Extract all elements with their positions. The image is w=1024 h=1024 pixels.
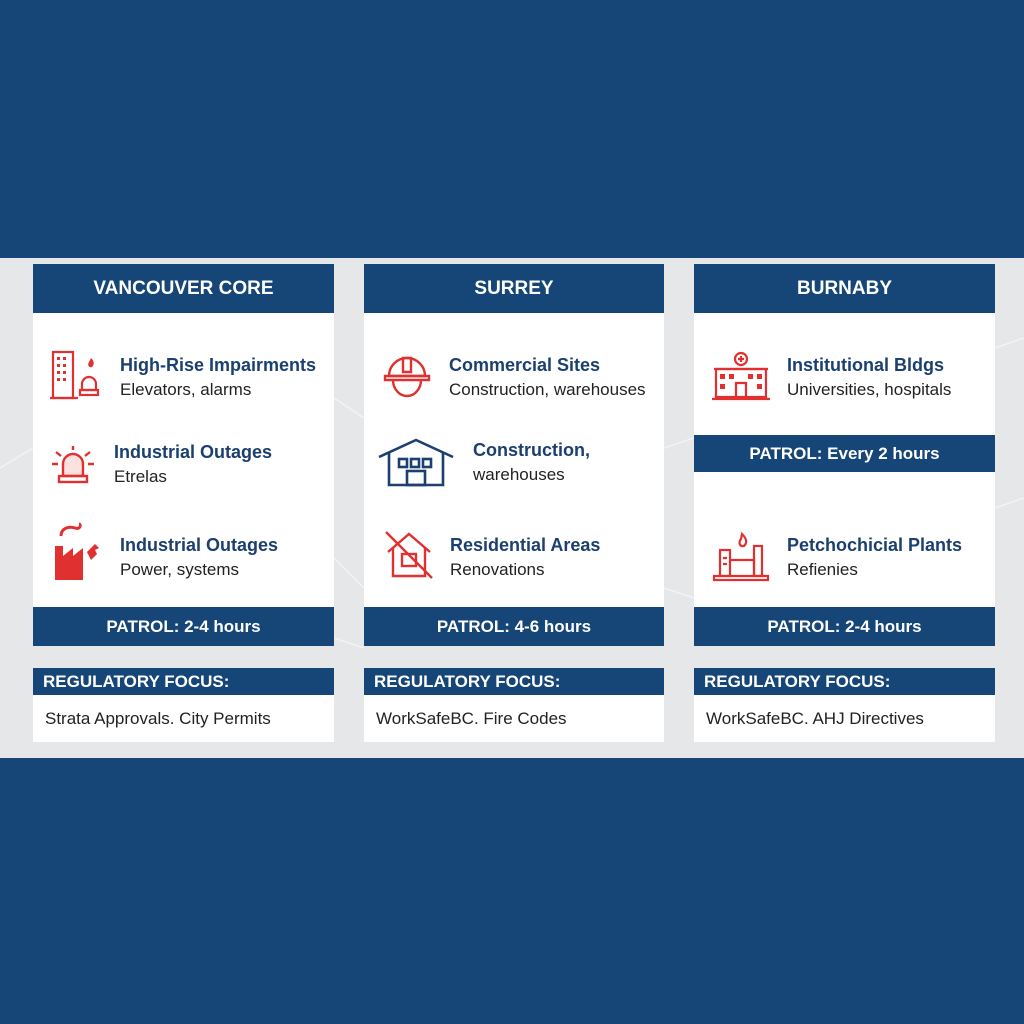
regulatory focus header bbox=[694, 668, 995, 695]
patrol bar: PATROL: 2-4 hours bbox=[106, 616, 261, 636]
card body bbox=[694, 313, 995, 607]
regulatory focus header bbox=[33, 668, 334, 695]
background map band bbox=[0, 258, 1024, 758]
text: Petchochicial Plants: Petchochicial Plants bbox=[787, 535, 962, 555]
text: High-Rise Impairments bbox=[120, 355, 316, 399]
text: Industrial Outages bbox=[114, 442, 272, 486]
text: Institutional Bldgs: Universities, hospitals bbox=[787, 380, 951, 399]
text: Construction: warehouses bbox=[473, 465, 565, 484]
icon: warehouse bbox=[378, 438, 454, 486]
panel: Burnaby bbox=[694, 264, 995, 742]
text: Petchochicial Plants: Refienies bbox=[787, 560, 858, 579]
text: Institutional Bldgs bbox=[787, 355, 951, 399]
regulatory focus header bbox=[364, 668, 664, 695]
card body bbox=[364, 313, 664, 607]
text: Commercial Sites: Commercial Sites bbox=[449, 355, 600, 375]
text: Residential Areas bbox=[450, 535, 600, 579]
text: Residential Areas: Renovations bbox=[450, 560, 545, 579]
text: Industrial Outages: Etrelas bbox=[114, 467, 167, 486]
text: Industrial Outages / Power bbox=[120, 535, 278, 579]
heading: Vancouver Core bbox=[33, 264, 334, 313]
regulatory text bbox=[33, 695, 334, 742]
icon: factory with wrench bbox=[55, 522, 99, 580]
regulatory text bbox=[694, 695, 995, 742]
text: High-Rise Impairments: High-Rise Impairments bbox=[120, 355, 316, 375]
panel: Surrey bbox=[364, 264, 664, 742]
text: Industrial Outages / Power: Industrial Outages bbox=[120, 535, 278, 555]
patrol bar middle: PATROL: Every 2 hours bbox=[749, 444, 940, 462]
icon: house crossed bbox=[385, 531, 433, 579]
heading: Vancouver Core: VANCOUVER CORE bbox=[93, 278, 274, 298]
panel: Vancouver Core bbox=[33, 264, 334, 742]
text: Residential Areas: Residential Areas bbox=[450, 535, 600, 555]
regulatory focus header: REGULATORY FOCUS: bbox=[43, 672, 229, 690]
patrol bar middle bbox=[694, 435, 995, 472]
regulatory text: WorkSafeBC. AHJ Directives bbox=[706, 708, 924, 728]
regulatory focus header: REGULATORY FOCUS: bbox=[374, 672, 560, 690]
heading: Surrey: SURREY bbox=[474, 278, 554, 298]
text: High-Rise Impairments: Elevators, alarms bbox=[120, 380, 251, 399]
regulatory text: Strata Approvals. City Permits bbox=[45, 708, 271, 728]
regulatory focus header: REGULATORY FOCUS: bbox=[704, 672, 890, 690]
patrol bar: PATROL: 4-6 hours bbox=[437, 616, 591, 636]
heading: Burnaby: BURNABY bbox=[797, 278, 892, 298]
text: Commercial Sites: Construction, warehouses bbox=[449, 380, 646, 399]
patrol bar bbox=[33, 607, 334, 646]
patrol bar bbox=[694, 607, 995, 646]
icon: high-rise with alarm bbox=[50, 350, 100, 400]
patrol bar bbox=[364, 607, 664, 646]
regulatory text: WorkSafeBC. Fire Codes bbox=[376, 708, 567, 728]
card body bbox=[33, 313, 334, 607]
text: Petchochicial Plants bbox=[787, 535, 962, 579]
icon: plant bbox=[712, 532, 770, 582]
text: Construction bbox=[473, 440, 590, 484]
text: Institutional Bldgs: Institutional Bldgs bbox=[787, 355, 944, 375]
icon: hard hat bbox=[384, 356, 430, 398]
heading: Surrey bbox=[364, 264, 664, 313]
icon: hospital bbox=[712, 352, 770, 400]
icon: siren bbox=[52, 446, 94, 484]
text: Industrial Outages: Industrial Outages bbox=[114, 442, 272, 462]
patrol bar: PATROL: 2-4 hours bbox=[767, 616, 922, 636]
text: Construction: Construction, bbox=[473, 440, 590, 460]
heading: Burnaby bbox=[694, 264, 995, 313]
regulatory text bbox=[364, 695, 664, 742]
text: Commercial Sites bbox=[449, 355, 646, 399]
text: Industrial Outages / Power: Power, systems bbox=[120, 560, 239, 579]
